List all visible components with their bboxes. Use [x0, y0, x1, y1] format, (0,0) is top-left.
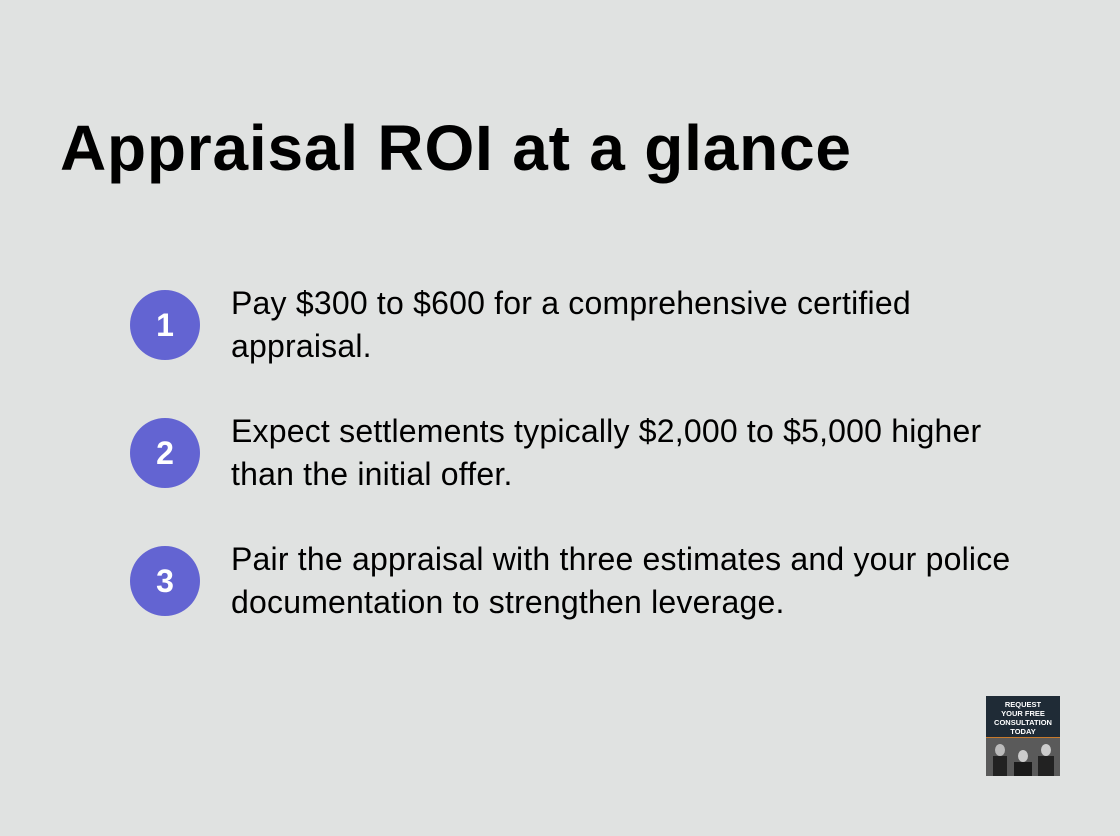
icon: number 1: [130, 290, 200, 360]
item 1: [130, 285, 911, 364]
title: Appraisal ROI at a glance: [60, 112, 852, 184]
text 3: Pair the appraisal with three estimates and your police documentation to strengthen leverage.: [231, 541, 1010, 620]
badge: consultation: [986, 696, 1060, 776]
item 3: [130, 541, 1010, 620]
badge: consultation: CONSULTATION: [994, 718, 1052, 727]
icon: number 3: 3: [156, 563, 174, 599]
item 2: [130, 413, 981, 492]
icon: number 1: 1: [156, 307, 174, 343]
badge: consultation: TODAY: [1010, 727, 1036, 736]
icon: number 2: 2: [156, 435, 174, 471]
badge: consultation: YOUR FREE: [1001, 709, 1045, 718]
icon: number 2: [130, 418, 200, 488]
badge: consultation: REQUEST: [1005, 700, 1041, 709]
text 1: Pay $300 to $600 for a comprehensive certified appraisal.: [231, 285, 911, 364]
text 2: Expect settlements typically $2,000 to $5,000 higher than the initial offer.: [231, 413, 981, 492]
icon: number 3: [130, 546, 200, 616]
